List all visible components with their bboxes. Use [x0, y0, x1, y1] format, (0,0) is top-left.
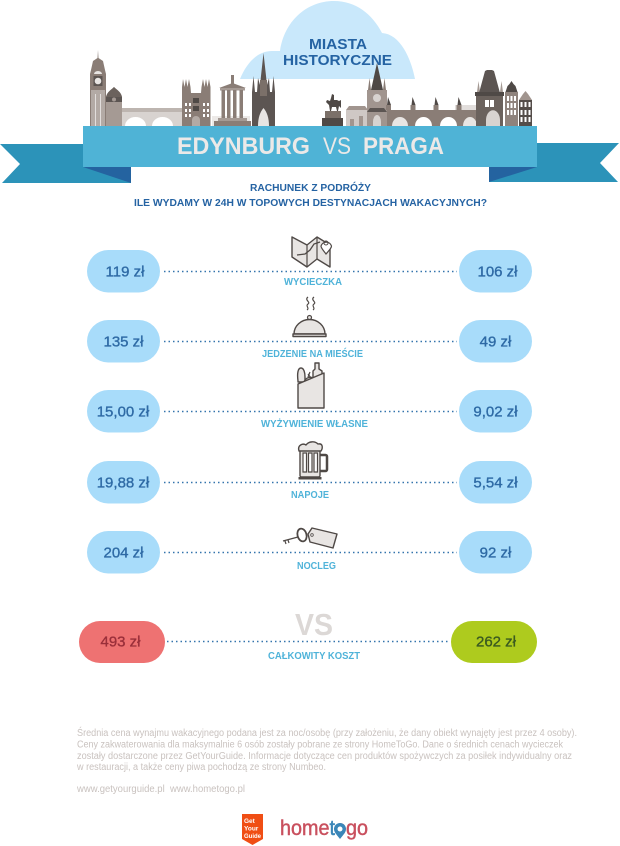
right value [459, 531, 532, 574]
logo: GetYourGuide: Get [244, 818, 256, 825]
left total [79, 621, 165, 663]
right value: 49 zł [480, 334, 512, 350]
row: napoje [87, 442, 532, 504]
right total [451, 621, 537, 663]
footnote text: Ceny zakwaterowania dla maksymalnie 6 osób zostały pobrane ze strony HomeToGo. Dane o średnich cenach wycieczek [77, 740, 564, 750]
left value: 204 zł [103, 544, 144, 562]
icon: folded map with pin [292, 237, 332, 267]
label: WYCIECZKA [284, 277, 342, 288]
icon: serving cloche [293, 297, 326, 336]
left value [87, 531, 160, 574]
subtitle heading: ILE WYDAMY W 24H W TOPOWYCH DESTYNACJACH WAKACYJNYCH? [134, 197, 487, 209]
banner face [83, 126, 537, 167]
columned monument [212, 75, 251, 126]
left value: 119 zł [106, 264, 145, 280]
left value [87, 320, 160, 362]
icon: beer mug [298, 442, 327, 480]
logo: GetYourGuide: Guide [244, 833, 261, 840]
row: nocleg [87, 528, 532, 574]
title: historyczne: HISTORYCZNE [283, 53, 392, 69]
right value [459, 390, 532, 432]
right ribbon tail [489, 143, 619, 182]
right value [459, 461, 532, 504]
row: wyżywienie własne [87, 363, 532, 432]
left value [87, 461, 160, 504]
left value [87, 390, 160, 432]
ribbon banner [0, 126, 619, 183]
logo: GetYourGuide [242, 814, 263, 845]
left value: 19,88 zł [97, 474, 150, 492]
right value: 9,02 zł [473, 404, 518, 420]
gothic crown tower [252, 53, 275, 126]
icon: grocery bag [298, 363, 324, 408]
label: NOCLEG [297, 561, 336, 572]
left ribbon tail [0, 144, 131, 183]
left fold [83, 167, 131, 183]
title: miasta: MIASTA [309, 37, 368, 53]
right value [459, 250, 532, 292]
footnote text: zostały dostarczone przez GetYourGuide. Informacje dotyczące cen produktów spożywczych za posiłek indywidualny oraz [77, 751, 572, 762]
right value: 92 zł [480, 544, 512, 562]
icon: key with tag [283, 528, 337, 548]
left value [87, 250, 160, 292]
row: całkowity koszt [79, 607, 537, 663]
subtitle heading: RACHUNEK Z PODRÓŻY [250, 181, 371, 194]
skyline: Prague [322, 63, 532, 126]
Charles Bridge [386, 97, 477, 126]
cloud with title [240, 1, 415, 79]
city name: Edynburg: EDYNBURG [177, 133, 310, 160]
left value: 135 zł [103, 334, 144, 350]
large vs: VS [295, 607, 333, 642]
old town hall and tower [346, 63, 387, 126]
row: wycieczka [87, 237, 532, 292]
left value: 15,00 zł [97, 404, 150, 420]
skyline: Edinburgh [90, 50, 275, 126]
bridge tower [475, 70, 504, 126]
label: CAŁKOWITY KOSZT [268, 651, 360, 662]
domed building [106, 87, 122, 126]
castle gatehouse [182, 79, 210, 126]
logo: GetYourGuide: Your [244, 826, 259, 832]
city name: Praga: PRAGA [363, 133, 444, 160]
footnote text [76, 726, 577, 773]
vs: VS [323, 133, 351, 160]
Big Ben style clock tower [90, 50, 106, 126]
right value: 106 zł [477, 264, 518, 280]
right total: 262 zł [476, 634, 517, 650]
right fold [489, 167, 537, 182]
arched stone bridge [122, 108, 182, 126]
label: NAPOJE [291, 490, 329, 501]
right value [459, 320, 532, 362]
logo: hometogo: hometogo [280, 817, 368, 840]
narrow townhouses [505, 81, 532, 126]
label: WYŻYWIENIE WŁASNE [261, 417, 368, 430]
footnote text: w restauracji, a także ceny piwa pochodzą ze strony Numbeo. [76, 762, 326, 773]
subtitle heading [134, 181, 487, 209]
label: JEDZENIE NA MIEŚCIE [262, 347, 363, 360]
footnote text: Średnia cena wynajmu wakacyjnego podana jest za noc/osobę (przy założeniu, że dany obiekt wynajęty jest przez 4 osoby). [77, 726, 577, 739]
right value: 5,54 zł [473, 474, 518, 492]
row: jedzenie na mieście [87, 297, 532, 362]
source urls: www.getyourguide.pl www.hometogo.pl [76, 784, 245, 795]
left total: 493 zł [100, 634, 141, 650]
equestrian statue [322, 94, 343, 126]
